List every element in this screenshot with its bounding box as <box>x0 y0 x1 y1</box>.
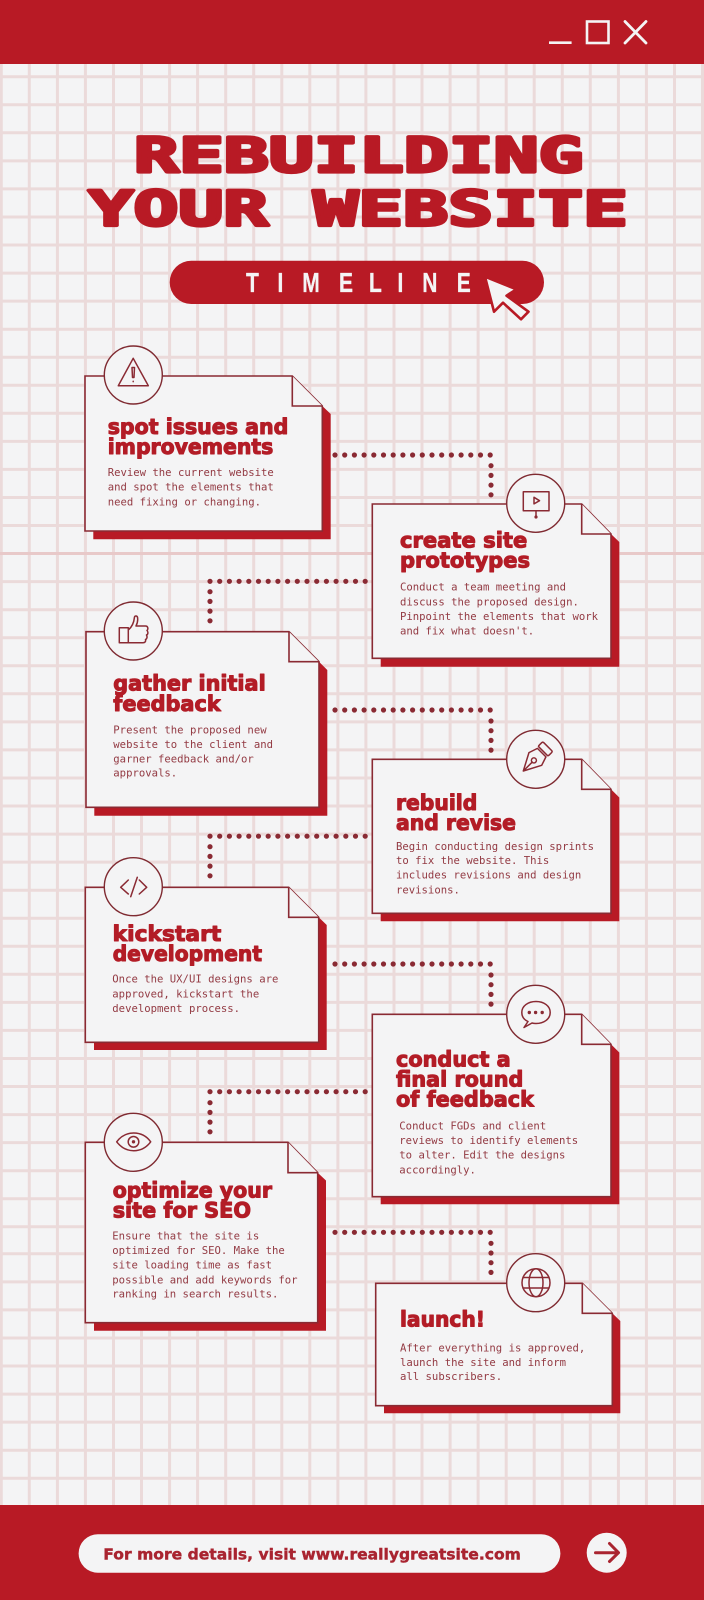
connector: step 7 to 8 <box>335 1232 492 1273</box>
description: approvals. <box>113 767 177 780</box>
timeline pill <box>170 261 544 319</box>
description: launch the site and inform <box>400 1356 566 1369</box>
panel: kickstart development <box>85 858 327 1050</box>
description: Conduct a team meeting and <box>400 581 566 594</box>
panel: optimize your site for SEO <box>85 1113 326 1331</box>
heading <box>113 672 266 717</box>
icon: warning triangle <box>104 346 162 404</box>
description: Ensure that the site is <box>112 1229 259 1242</box>
description: reviews to identify elements <box>399 1134 578 1147</box>
panel: rebuild and revise <box>372 730 619 921</box>
heading <box>108 415 288 460</box>
icon: code brackets <box>104 858 162 916</box>
connector: step 1 to 2 <box>335 455 492 496</box>
icon: thumbs up <box>104 602 162 660</box>
description: discuss the proposed design. <box>400 595 579 608</box>
heading: optimize your <box>113 1178 272 1203</box>
connector: step 3 to 4 <box>335 710 492 751</box>
title <box>88 128 628 237</box>
description <box>113 723 273 780</box>
description: Once the UX/UI designs are <box>112 973 278 986</box>
heading: of feedback <box>396 1088 535 1113</box>
title: REBUILDING <box>134 128 584 184</box>
heading: feedback <box>113 692 221 717</box>
heading: final round <box>396 1068 523 1093</box>
description: garner feedback and/or <box>113 753 254 766</box>
icon: minimize <box>549 41 572 44</box>
description <box>112 973 278 1015</box>
description: approved, kickstart the <box>112 987 259 1000</box>
panel: create site prototypes <box>372 474 619 667</box>
icon: arrow button <box>587 1533 627 1573</box>
connector: step 5 to 6 <box>335 964 492 1005</box>
heading: and revise <box>396 811 516 836</box>
description: ranking in search results. <box>112 1288 278 1301</box>
icon: presentation board <box>507 474 565 532</box>
description <box>108 466 274 508</box>
description: Present the proposed new <box>113 723 267 736</box>
heading <box>113 1178 272 1223</box>
connector: step 6 to 7 <box>210 1092 366 1133</box>
description: After everything is approved, <box>400 1341 585 1354</box>
description: site loading time as fast <box>112 1259 272 1272</box>
heading: prototypes <box>400 549 530 574</box>
heading: launch! <box>400 1308 485 1333</box>
heading: development <box>113 942 262 967</box>
heading <box>113 922 262 967</box>
description: Begin conducting design sprints <box>396 840 594 853</box>
description: to fix the website. This <box>396 854 549 867</box>
description: and fix what doesn't. <box>400 624 534 637</box>
description: need fixing or changing. <box>108 495 261 508</box>
description <box>400 1341 585 1383</box>
description: Review the current website <box>108 466 274 479</box>
footer text: For more details, visit www.reallygreatsite.com <box>103 1545 521 1563</box>
description: accordingly. <box>399 1163 476 1176</box>
panel: spot issues and improvements <box>85 346 331 539</box>
icon: maximize <box>587 22 608 43</box>
panel: launch <box>376 1254 620 1413</box>
connector: step 2 to 3 <box>210 581 366 622</box>
description: optimized for SEO. Make the <box>112 1244 285 1257</box>
panel: conduct a final round of feedback <box>372 985 619 1204</box>
icon: pen nib <box>507 730 565 788</box>
description: development process. <box>112 1002 240 1015</box>
heading: create site <box>400 528 527 553</box>
heading: kickstart <box>113 922 221 947</box>
panel: gather initial feedback <box>86 602 327 816</box>
description <box>396 840 594 896</box>
heading <box>400 528 530 574</box>
description <box>400 581 599 637</box>
heading <box>396 791 516 836</box>
heading: conduct a <box>396 1048 511 1073</box>
pill label: TIMELINE <box>246 268 471 299</box>
description: Pinpoint the elements that work <box>400 610 599 623</box>
description: and spot the elements that <box>108 481 274 494</box>
description <box>399 1119 578 1176</box>
footer pill <box>79 1534 560 1573</box>
heading: site for SEO <box>113 1198 251 1223</box>
title: YOUR WEBSITE <box>88 181 628 237</box>
icon: globe <box>507 1254 565 1312</box>
icon: cursor arrow <box>485 277 528 319</box>
heading <box>396 1048 535 1113</box>
heading: spot issues and <box>108 415 288 440</box>
window title bar <box>0 0 704 64</box>
icon: speech bubble <box>507 985 565 1043</box>
footer bar <box>0 1505 704 1600</box>
description: to alter. Edit the designs <box>399 1149 565 1162</box>
icon: close <box>625 22 646 43</box>
description: all subscribers. <box>400 1370 502 1383</box>
heading: rebuild <box>396 791 477 816</box>
description: Conduct FGDs and client <box>399 1119 546 1132</box>
icon: eye <box>104 1113 162 1171</box>
description: revisions. <box>396 883 460 896</box>
description <box>112 1229 298 1301</box>
connector: step 4 to 5 <box>210 836 366 877</box>
heading: gather initial <box>113 672 266 697</box>
description: website to the client and <box>113 738 273 751</box>
description: possible and add keywords for <box>112 1273 298 1286</box>
heading: improvements <box>108 435 273 460</box>
description: includes revisions and design <box>396 869 581 882</box>
